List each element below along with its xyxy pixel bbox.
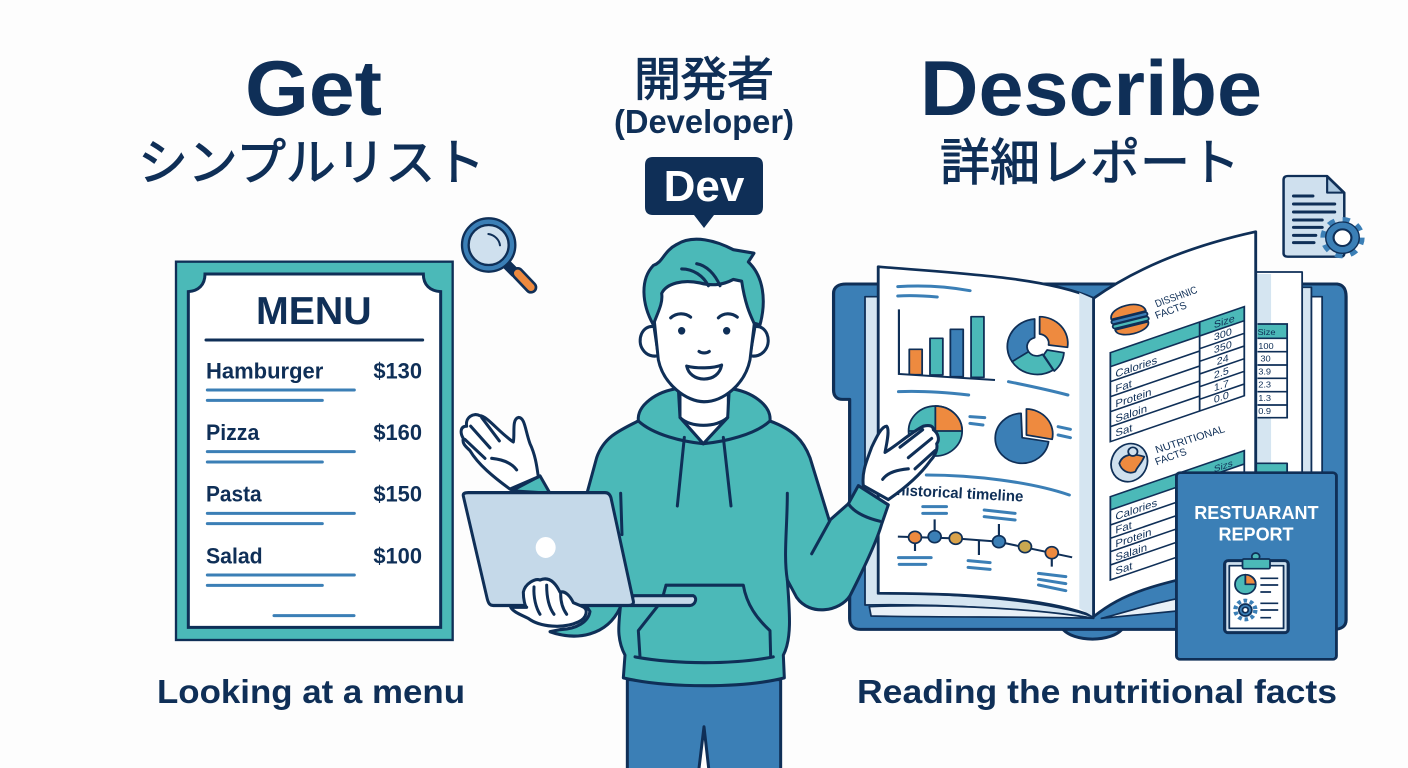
icon: nutrition medallion [1105, 439, 1153, 487]
badge: Dev speech bubble: Dev [664, 162, 745, 211]
bar chart [899, 309, 995, 380]
table behind page: 2.3 [1258, 380, 1271, 390]
pie chart: blue and orange [995, 409, 1053, 463]
table: nutritional facts: Sizs [1214, 458, 1233, 475]
table: nutritional facts: Salain [1115, 542, 1147, 564]
table: nutritional facts: Calories [1115, 497, 1158, 523]
table: dish facts: Calories [1115, 355, 1158, 380]
heading: Get: Get [245, 44, 382, 132]
menu item: hamburger: Hamburger [206, 358, 324, 383]
menu item: salad [206, 543, 422, 585]
inner collar [680, 417, 728, 444]
caption: reading the nutritional facts: Reading the nutritional facts [857, 673, 1337, 710]
table behind page [1255, 324, 1287, 477]
label: nutritional facts: NUTRITIONAL [1154, 424, 1227, 456]
table: dish facts: Saloin [1115, 403, 1147, 425]
menu title: MENU [256, 289, 372, 333]
hood right [703, 388, 770, 444]
label: dish facts: FACTS [1153, 300, 1189, 322]
icon: magnifying glass [462, 218, 531, 287]
left hand [461, 415, 538, 489]
trousers [627, 680, 781, 768]
table: dish facts: Fat [1115, 378, 1133, 395]
table: dish facts [1110, 307, 1244, 442]
menu item: pizza: Pizza [206, 420, 260, 445]
laptop [463, 493, 696, 606]
table behind page: 100 [1258, 341, 1274, 351]
left page [878, 267, 1094, 617]
menu item: pizza: $160 [373, 420, 422, 445]
right cuff [848, 504, 880, 521]
ears [640, 326, 768, 356]
side tabs [1317, 313, 1335, 424]
caption: looking at a menu: Looking at a menu [157, 673, 465, 710]
pie chart: teal and orange [909, 406, 962, 456]
report title: RESTUARANT [1194, 503, 1319, 524]
menu item: pizza [206, 420, 422, 462]
subheading: detailed report: 詳細レポート [940, 123, 1240, 195]
menu item: hamburger [206, 358, 422, 400]
neck [680, 388, 728, 444]
menu item: hamburger: $130 [373, 358, 422, 383]
page stacks [865, 272, 1322, 618]
menu item: salad: Salad [206, 543, 263, 568]
menu item: pasta: Pasta [206, 482, 262, 507]
report cover [1176, 473, 1336, 659]
menu frame [176, 262, 453, 640]
right hand [863, 426, 938, 500]
folder back [834, 284, 1346, 629]
icon: clipboard [1225, 553, 1288, 633]
table behind page: 0.9 [1258, 406, 1271, 416]
hair strands [682, 264, 720, 286]
left sleeve upper [512, 476, 550, 493]
table behind page: Size [1257, 327, 1276, 337]
folder spine [1062, 628, 1123, 639]
panel: report book [834, 176, 1362, 659]
table: nutritional facts: Sat [1115, 560, 1133, 578]
panel: menu [176, 218, 531, 640]
hair [644, 239, 763, 325]
badge: Dev speech bubble [645, 157, 763, 228]
table: dish facts: 350 [1214, 339, 1232, 356]
report title [1194, 503, 1319, 545]
heading: developer english: (Developer) [614, 103, 794, 140]
table: dish facts: Sat [1115, 422, 1133, 440]
menu item: pasta: $150 [373, 482, 422, 507]
hoodie seams and strings [621, 437, 830, 580]
hand holding laptop [511, 579, 586, 626]
donut chart [1007, 317, 1068, 374]
developer character [461, 239, 938, 768]
table: nutritional facts [1110, 451, 1244, 580]
heading: developer japanese: 開発者 [634, 41, 774, 110]
table behind page: 30 [1260, 354, 1271, 364]
table: dish facts: 0.0 [1214, 390, 1229, 406]
table: dish facts: 2.5 [1214, 365, 1229, 382]
table: dish facts: 1.7 [1214, 378, 1229, 394]
timeline chart [898, 507, 1072, 591]
label: dish facts: DISSHNIC [1153, 284, 1199, 310]
table behind page: 3.9 [1258, 367, 1271, 377]
icon: burger [1108, 301, 1152, 338]
subheading: simple list: シンプルリスト [138, 123, 485, 195]
right page [1094, 232, 1256, 617]
left sleeve lower [550, 597, 620, 636]
hoodie pocket [635, 585, 773, 663]
table: dish facts: 300 [1214, 326, 1232, 344]
table: nutritional facts: Protein [1115, 527, 1152, 550]
label: nutritional facts: FACTS [1153, 446, 1189, 468]
table: dish facts: Size [1214, 313, 1235, 331]
menu item: pasta [206, 482, 422, 524]
table: nutritional facts: Fat [1115, 520, 1133, 537]
menu item: salad: $100 [373, 543, 422, 568]
icon: document with gear [1284, 176, 1362, 257]
historical timeline label: historical timeline [896, 482, 1024, 505]
face features [671, 314, 737, 379]
face [654, 272, 755, 402]
table: dish facts: Protein [1115, 387, 1152, 410]
hoodie body [587, 410, 888, 686]
menu paper [188, 274, 441, 627]
hood left [638, 388, 703, 444]
label: dish facts [1153, 284, 1199, 322]
table: dish facts: 24 [1217, 353, 1229, 368]
heading: Describe: Describe [920, 44, 1262, 132]
report title: REPORT [1219, 524, 1294, 545]
table behind page: 1.3 [1258, 393, 1271, 403]
